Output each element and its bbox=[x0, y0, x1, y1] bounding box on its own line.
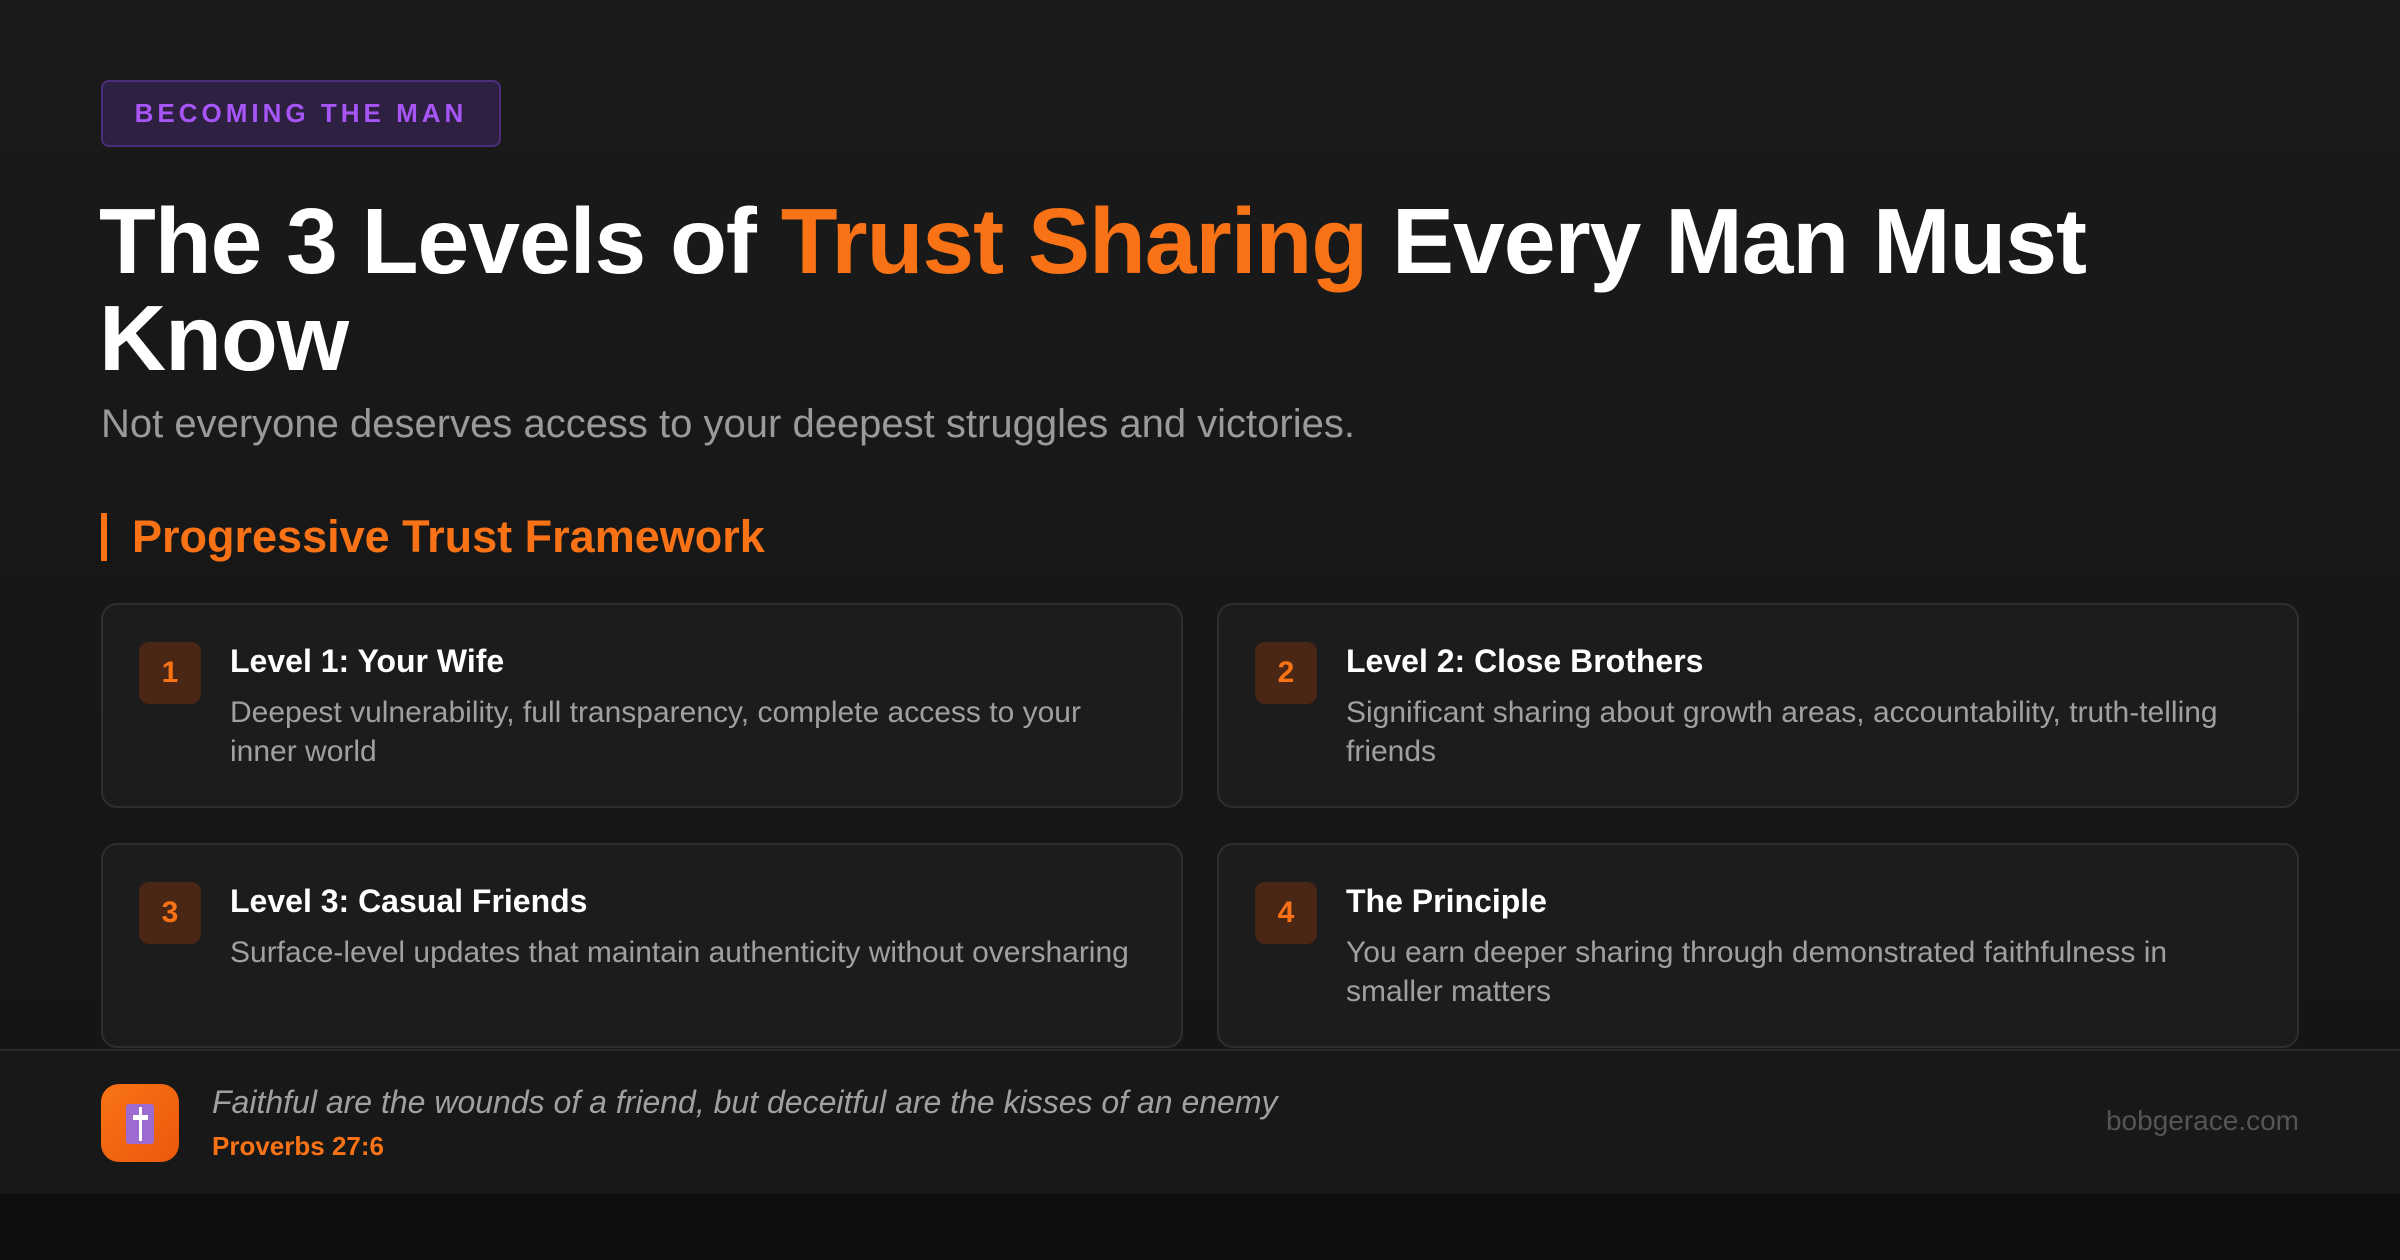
card: principle bbox=[1217, 843, 2299, 1048]
subtitle: Not everyone deserves access to your deepest struggles and victories. bbox=[101, 402, 1355, 446]
card description: You earn deeper sharing through demonstrated faithfulness in smaller matters bbox=[1346, 936, 2167, 1008]
number badge 1 bbox=[139, 642, 201, 704]
card: level 1 bbox=[101, 603, 1183, 808]
card description: Deepest vulnerability, full transparency, complete access to your inner world bbox=[230, 696, 1081, 768]
card title: The Principle bbox=[1346, 883, 1547, 919]
number badge 4: 4 bbox=[1278, 896, 1294, 929]
number badge 2: 2 bbox=[1278, 656, 1294, 689]
section heading: Progressive Trust Framework bbox=[132, 511, 765, 562]
title: The 3 Levels of Trust Sharing Every Man Must bbox=[99, 189, 2086, 293]
card: level 3 bbox=[101, 843, 1183, 1048]
number badge 2 bbox=[1255, 642, 1317, 704]
card title: Level 2: Close Brothers bbox=[1346, 643, 1703, 679]
site: bobgerace.com bbox=[2106, 1105, 2299, 1136]
footer bbox=[0, 1049, 2400, 1194]
card: level 2 bbox=[1217, 603, 2299, 808]
title: Know bbox=[99, 286, 348, 390]
title bbox=[99, 189, 2086, 390]
badge: BECOMING THE MAN bbox=[135, 98, 467, 128]
number badge 3: 3 bbox=[162, 896, 178, 929]
icon: cross bbox=[101, 1084, 179, 1162]
card description: Significant sharing about growth areas, accountability, truth-telling friends bbox=[1346, 696, 2218, 768]
number badge 4 bbox=[1255, 882, 1317, 944]
number badge 1: 1 bbox=[162, 656, 178, 689]
badge bbox=[101, 80, 501, 147]
card description: Surface-level updates that maintain authenticity without oversharing bbox=[230, 936, 1129, 969]
number badge 3 bbox=[139, 882, 201, 944]
card title: Level 1: Your Wife bbox=[230, 643, 504, 679]
card title: Level 3: Casual Friends bbox=[230, 883, 587, 919]
reference: Proverbs 27:6 bbox=[212, 1131, 384, 1161]
quote: Faithful are the wounds of a friend, but deceitful are the kisses of an enemy bbox=[212, 1084, 1278, 1120]
